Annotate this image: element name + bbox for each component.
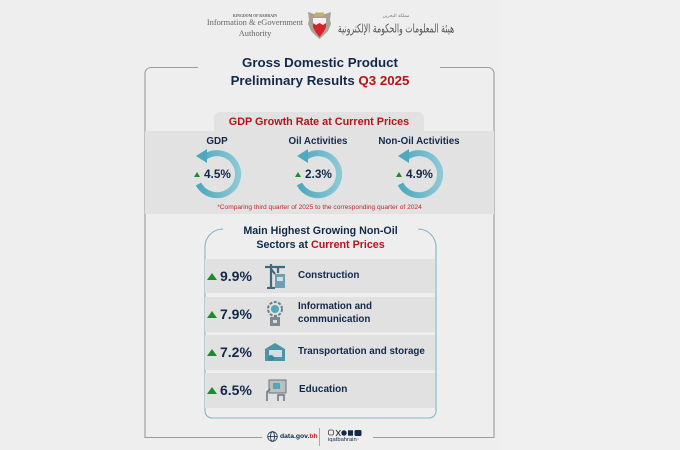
title bbox=[231, 55, 409, 88]
label: Information and bbox=[298, 301, 372, 312]
small Arabic line: مملكة البحرين bbox=[383, 14, 409, 19]
right background strip bbox=[500, 0, 680, 450]
icon: warehouse bbox=[265, 343, 285, 361]
label: Construction bbox=[298, 270, 359, 281]
ring: Non-Oil bbox=[398, 149, 444, 198]
logo: Information & eGovernment Authority bbox=[207, 14, 303, 38]
row: Construction bbox=[205, 259, 435, 293]
logo: Information & eGovernment Authority: KINGDOM OF BAHRAIN bbox=[233, 14, 277, 18]
panel outline bbox=[204, 228, 437, 418]
panel: non-oil sectors bbox=[204, 225, 437, 418]
title: Preliminary Results Q3 2025 bbox=[231, 73, 409, 88]
label: Non-Oil Activities: Non-Oil Activities bbox=[378, 136, 460, 147]
footer: website bbox=[267, 431, 318, 442]
value: GDP 4.5%: 4.5% bbox=[204, 167, 231, 181]
footer: social bbox=[319, 428, 364, 446]
handle: iqatbahrain◦ bbox=[328, 437, 359, 443]
label: Transportation and storage bbox=[298, 346, 425, 357]
panel background bbox=[145, 112, 494, 214]
label bbox=[298, 301, 372, 324]
value: 9.9% bbox=[220, 268, 252, 284]
icons: social media bbox=[328, 430, 362, 436]
icon: coat of arms bbox=[308, 12, 331, 39]
logo: Information & eGovernment Authority: Authority bbox=[239, 28, 271, 38]
title: Gross Domestic Product bbox=[242, 55, 398, 70]
ring: Oil bbox=[296, 149, 342, 198]
footnote: *Comparing third quarter of 2025 to the corresponding quarter of 2024 bbox=[217, 204, 422, 211]
value: 6.5% bbox=[220, 382, 252, 398]
value: 7.9% bbox=[220, 306, 252, 322]
logo: Arabic authority name bbox=[338, 14, 454, 36]
label: Oil Activities: Oil Activities bbox=[288, 136, 347, 147]
row: Information and communication bbox=[205, 297, 435, 332]
label: communication bbox=[298, 314, 370, 324]
label: Education bbox=[299, 384, 347, 395]
icon: gear and hand bbox=[267, 301, 283, 326]
heading: Main Highest Growing Non-Oil bbox=[243, 225, 398, 237]
value: Non-Oil 4.9%: 4.9% bbox=[406, 167, 433, 181]
panel: GDP growth rate bbox=[145, 112, 494, 214]
row: Transportation and storage bbox=[205, 335, 435, 370]
value: Oil 2.3%: 2.3% bbox=[305, 167, 332, 181]
icon: teacher board bbox=[266, 380, 286, 401]
value: 7.2% bbox=[220, 344, 252, 360]
heading: GDP Growth Rate at Current Prices bbox=[229, 116, 409, 128]
heading: Sectors at Current Prices bbox=[256, 239, 385, 251]
icon: crane bbox=[265, 264, 285, 289]
logo: Information & eGovernment Authority: Information & eGovernment bbox=[207, 18, 303, 27]
row: Education bbox=[205, 373, 435, 408]
label: GDP: GDP bbox=[206, 136, 228, 147]
heading bbox=[243, 225, 398, 251]
main Arabic line: هيئة المعلومات والحكومة الإلكترونية bbox=[338, 22, 454, 35]
ring: GDP bbox=[196, 149, 242, 198]
icon: globe bbox=[267, 431, 278, 442]
text: data.gov.bh bbox=[280, 433, 318, 440]
